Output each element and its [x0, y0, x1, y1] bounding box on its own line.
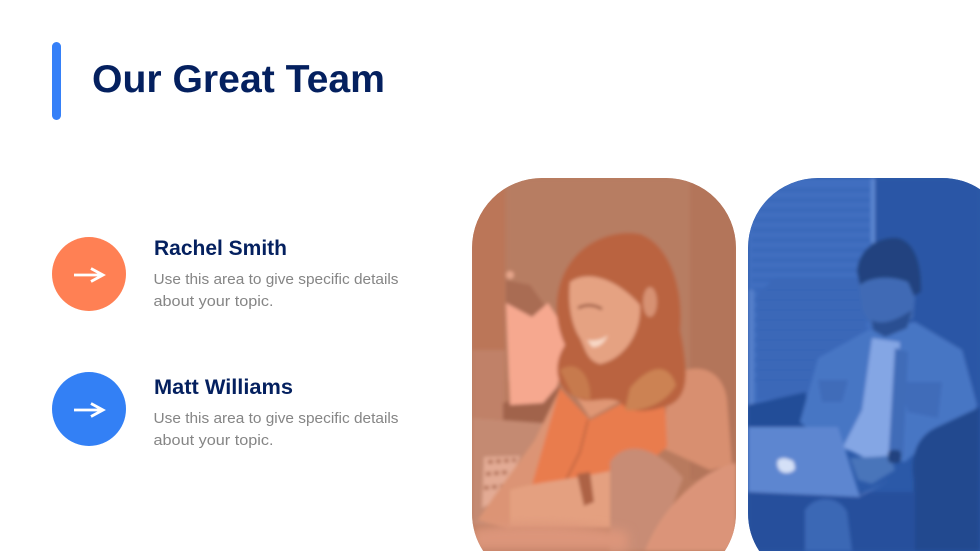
team member: Matt Williams [52, 372, 398, 449]
hand [850, 456, 895, 484]
chair back [748, 392, 808, 426]
description: Rachel Smith: about your topic. [154, 293, 274, 310]
name: Matt Williams: Matt Williams [154, 376, 293, 399]
dark wall [944, 178, 980, 190]
left arm [478, 394, 559, 527]
eyes and smile [578, 305, 602, 309]
face [569, 276, 640, 364]
bright window [506, 303, 570, 405]
top [532, 388, 667, 485]
icon: blue arrow circle [52, 372, 126, 446]
patterned pillow [482, 456, 520, 508]
apple logo [777, 458, 795, 473]
hair [857, 238, 921, 296]
wall [504, 178, 692, 189]
description: Rachel Smith: Use this area to give specific details [154, 271, 398, 288]
hand and forearm [510, 470, 615, 528]
photo card: Rachel (orange duotone) [472, 178, 736, 551]
dark sill [503, 385, 560, 424]
accent bar [52, 42, 61, 120]
dark chair arm [913, 407, 980, 551]
sofa arm right [645, 463, 736, 551]
bottom sofa fade [472, 523, 628, 551]
watch [888, 450, 901, 463]
left pillar [472, 188, 506, 247]
right arm and shoulder [660, 369, 732, 470]
legs [805, 499, 852, 551]
beard [872, 310, 912, 337]
jacket [800, 322, 977, 462]
face [866, 277, 916, 323]
pillow [610, 449, 683, 551]
photo card: Matt (blue duotone) [748, 178, 980, 551]
laptop [748, 427, 860, 497]
icon: orange arrow circle [52, 237, 126, 311]
tee [843, 338, 900, 458]
description: Matt Williams: about your topic. [154, 432, 274, 449]
team member: Rachel Smith [52, 237, 398, 311]
blinds window [748, 178, 872, 415]
hair [557, 233, 686, 411]
lamp shadow [506, 281, 544, 316]
watch [577, 472, 594, 506]
name: Rachel Smith: Rachel Smith [154, 237, 287, 260]
chest [578, 398, 618, 418]
placket [889, 348, 908, 458]
lower body [748, 492, 915, 551]
ear [643, 287, 657, 317]
sofa back [472, 420, 542, 525]
description: Matt Williams: Use this area to give specific details [154, 410, 398, 427]
title: Our Great Team [92, 58, 385, 101]
